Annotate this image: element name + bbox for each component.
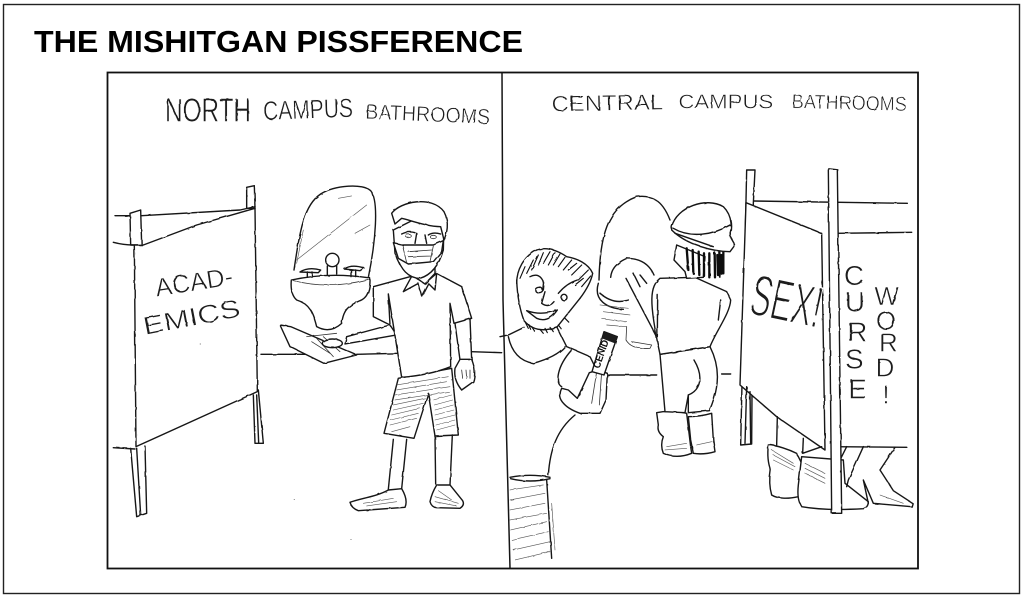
stall graffiti: curse: E [848, 373, 867, 404]
panel: north campus bathrooms [113, 93, 502, 539]
stall graffiti: word: W [874, 281, 899, 311]
title: THE MISHITGAN PISSFERENCE [34, 24, 523, 59]
stall graffiti: word [874, 281, 899, 409]
heading: north campus bathrooms: CAMPUS [262, 93, 353, 126]
stall post [828, 168, 842, 513]
torso [652, 277, 731, 354]
hair [392, 202, 447, 240]
character: grinning man [500, 249, 617, 560]
legs in occupied stall [768, 417, 913, 509]
heading: north campus bathrooms: NORTH [165, 93, 251, 130]
hat [672, 203, 735, 252]
grin [527, 310, 557, 320]
character: person in hat with pants down [652, 203, 735, 456]
sink and faucet [291, 253, 370, 330]
covid marker [592, 332, 617, 375]
character: masked student [280, 202, 475, 511]
extended arm holding phone [345, 325, 397, 344]
head [393, 217, 444, 278]
stall graffiti: word: D [876, 353, 894, 383]
stall graffiti: curse [844, 260, 867, 404]
mirror [599, 196, 670, 280]
obscured sink [597, 258, 657, 349]
floor line [608, 372, 731, 377]
hair [687, 248, 723, 277]
stall graffiti: word: ! [882, 379, 890, 409]
stall graffiti: word: R [879, 328, 898, 358]
heading: central campus bathrooms: CAMPUS [678, 91, 773, 113]
stall graffiti: curse: S [845, 343, 864, 374]
collar [508, 337, 565, 363]
stall graffiti: curse: C [844, 260, 864, 291]
stall graffiti: word: O [876, 305, 896, 335]
trouser shading [510, 485, 555, 560]
legs [388, 435, 452, 489]
specks [200, 344, 351, 539]
heading: central campus bathrooms: BATHROOMS [792, 91, 907, 116]
waist [510, 475, 552, 558]
panel divider [502, 73, 510, 568]
brows and eyes [530, 275, 577, 293]
shirt [373, 273, 472, 377]
beard stubble [525, 318, 568, 333]
stall door and walls [740, 170, 912, 450]
mirror [294, 186, 376, 277]
right arm and hand [455, 318, 472, 360]
boots [657, 411, 692, 456]
panel: central campus bathrooms [500, 89, 913, 560]
heading: central campus bathrooms: CENTRAL [551, 89, 663, 116]
eyes [402, 232, 441, 235]
shorts [384, 368, 458, 438]
head [674, 245, 705, 278]
hand with raised finger [560, 370, 607, 413]
body [507, 327, 600, 477]
stall graffiti: emics: EMICS [141, 295, 243, 341]
marker label: CENID [592, 339, 612, 370]
stall graffiti: academics: ACAD- [153, 263, 235, 303]
hair [517, 249, 593, 298]
heading: central campus bathrooms [551, 89, 907, 116]
heading: north campus bathrooms [165, 93, 491, 130]
comic panel frame [108, 72, 918, 568]
bare legs and seat [660, 347, 717, 413]
stall: academics [113, 186, 263, 517]
stall graffiti: curse: R [847, 317, 867, 348]
stall graffiti: curse: U [845, 287, 865, 318]
collar [403, 273, 437, 296]
heading: north campus bathrooms: BATHROOMS [365, 100, 491, 129]
floor line [261, 352, 502, 354]
neck [412, 257, 435, 284]
head [517, 252, 592, 329]
arm [558, 350, 572, 387]
face mask [393, 241, 443, 264]
stall graffiti: sex: SEX! [745, 262, 828, 341]
shoes [350, 489, 406, 511]
